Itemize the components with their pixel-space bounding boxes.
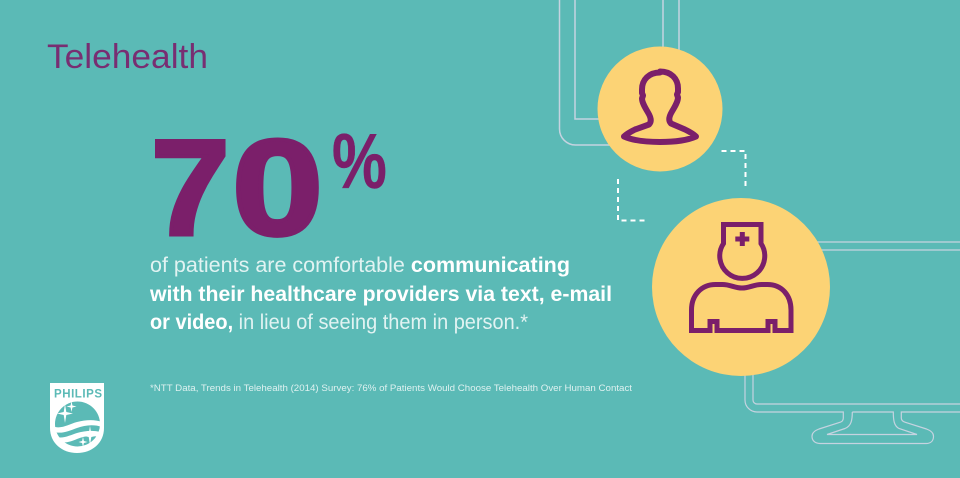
statement text [149, 254, 612, 334]
big number 70%: 0 [232, 112, 323, 263]
logo: Philips shield [50, 383, 104, 453]
big number 70%: 7 [151, 112, 230, 264]
footnote: *NTT Data, Trends in Telehealth (2014) Survey: 76% of Patients Would Choose Telehealth Over Human Contact [150, 383, 633, 393]
dashed connector: top right [722, 151, 746, 187]
phone outline [560, 0, 679, 145]
title: Telehealth [47, 38, 208, 76]
statement text: or video, in lieu of seeing them in person.* [150, 311, 528, 334]
dashed connector: bottom left [618, 179, 648, 220]
monitor outline [745, 242, 960, 444]
icon: patient [598, 46, 722, 172]
statement text: of patients are comfortable communicating [150, 254, 570, 277]
big number 70%: % [332, 117, 387, 205]
big number 70% [151, 112, 387, 264]
logo: Philips shield: PHILIPS [54, 388, 102, 400]
icon: nurse [652, 198, 830, 376]
statement text: with their healthcare providers via text, e-mail [149, 283, 612, 306]
